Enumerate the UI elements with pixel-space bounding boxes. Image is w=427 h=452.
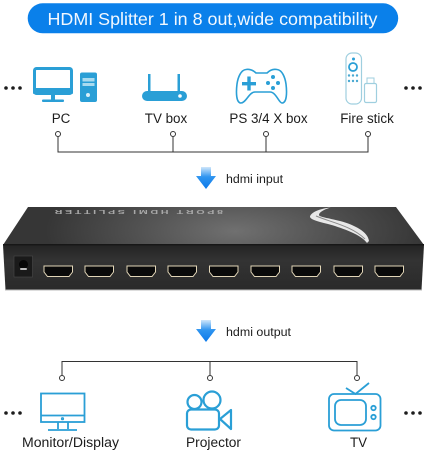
label: Projector: Projector bbox=[186, 435, 242, 450]
device swoosh logo bbox=[310, 208, 369, 243]
input connector lines bbox=[56, 132, 370, 152]
label: PS 3/4 X box: PS 3/4 X box bbox=[229, 111, 308, 126]
arrow: hdmi input bbox=[196, 167, 216, 189]
label: TV box: TV box bbox=[145, 111, 188, 126]
device front panel bbox=[3, 245, 424, 290]
icon: TV box bbox=[142, 74, 187, 101]
label: Monitor/Display: Monitor/Display bbox=[22, 435, 119, 450]
output connector lines bbox=[60, 362, 360, 380]
left dots, input row bbox=[4, 86, 22, 90]
left dots, output row bbox=[4, 411, 22, 415]
right dots, output row bbox=[404, 411, 422, 415]
HDMI splitter device bbox=[3, 207, 424, 290]
device printed text: 8PORT HDMI SPLITTER bbox=[52, 208, 223, 214]
arrow: hdmi output bbox=[196, 320, 216, 342]
icon: monitor bbox=[41, 394, 84, 430]
device top panel bbox=[3, 207, 424, 245]
title banner: HDMI Splitter 1 in 8 out,wide compatibility bbox=[48, 9, 378, 29]
label: Fire stick: Fire stick bbox=[340, 111, 394, 126]
title banner bbox=[28, 3, 398, 33]
label: TV: TV bbox=[350, 435, 367, 450]
label: hdmi output: hdmi output bbox=[226, 327, 292, 339]
HDMI output ports bbox=[44, 266, 404, 276]
power socket bbox=[14, 256, 32, 277]
icon: TV bbox=[329, 383, 380, 430]
icon: PC bbox=[33, 68, 97, 102]
label: hdmi input: hdmi input bbox=[226, 174, 284, 186]
label: PC: PC bbox=[52, 111, 71, 126]
icon: game controller bbox=[236, 69, 287, 103]
right dots, input row bbox=[404, 86, 422, 90]
icon: fire stick remote bbox=[346, 53, 376, 104]
icon: projector camera bbox=[187, 392, 231, 430]
